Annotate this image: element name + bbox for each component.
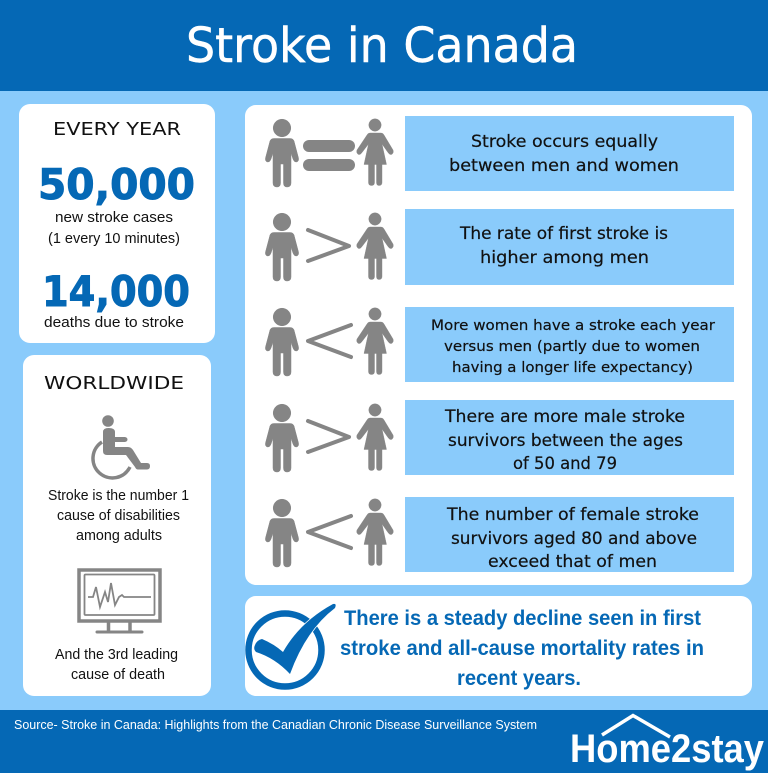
- callout text: stroke and all-cause mortality rates in: [340, 637, 704, 660]
- stat: deaths: 14,000: [42, 267, 190, 316]
- row: more female survivors: The number of female stroke: [446, 505, 699, 524]
- row: more women each year: [265, 307, 734, 382]
- row: more female survivors: exceed that of men: [488, 552, 657, 571]
- row: more male survivors: There are more male stroke: [444, 407, 685, 426]
- callout text: recent years.: [457, 667, 581, 690]
- text: disabilities: [48, 488, 189, 544]
- row: more women each year: More women have a stroke each year: [431, 318, 715, 334]
- source note: Source- Stroke in Canada: Highlights from the Canadian Chronic Disease Surveillance System: [14, 718, 537, 732]
- row: equal: [265, 116, 734, 191]
- icon: heart monitor: [79, 570, 160, 632]
- row: more women each year: having a longer life expectancy): [452, 360, 693, 376]
- stat: new stroke cases: 50,000: [38, 160, 195, 209]
- heading: every year: EVERY YEAR: [53, 120, 181, 140]
- row: more male survivors: survivors between the ages: [448, 431, 683, 450]
- callout text: There is a steady decline seen in first: [344, 607, 701, 630]
- stat: new stroke cases: new stroke cases: [55, 210, 173, 226]
- row: equal: Stroke occurs equally: [471, 132, 658, 151]
- text: disabilities: among adults: [76, 528, 162, 544]
- row: equal: between men and women: [449, 156, 679, 175]
- row: first stroke higher among men: [265, 209, 734, 285]
- row: more women each year: versus men (partly due to women: [444, 339, 700, 355]
- stat: deaths: deaths due to stroke: [44, 315, 184, 331]
- text: disabilities: cause of disabilities: [57, 508, 180, 524]
- text: third leading cause: And the 3rd leading: [55, 647, 178, 663]
- stat: new stroke cases: [38, 160, 195, 247]
- icon: wheelchair: [93, 415, 150, 478]
- heading: worldwide: WORLDWIDE: [44, 374, 184, 394]
- text: disabilities: Stroke is the number 1: [48, 488, 189, 504]
- title: Stroke in Canada: [186, 18, 578, 74]
- row: more male survivors: [265, 400, 734, 475]
- row: more female survivors: [265, 497, 734, 572]
- text: third leading cause: cause of death: [71, 667, 165, 683]
- panel: every year: [19, 104, 215, 343]
- footer band: [0, 710, 768, 773]
- stat: new stroke cases: (1 every 10 minutes): [48, 231, 180, 247]
- text: third leading cause: [55, 647, 178, 683]
- panel: comparisons: [245, 105, 752, 585]
- icon: check mark: [248, 604, 336, 686]
- row: first stroke higher among men: higher among men: [480, 248, 649, 267]
- row: first stroke higher among men: The rate of first stroke is: [459, 224, 668, 243]
- callout text: [340, 607, 704, 690]
- panel: worldwide: [23, 355, 211, 696]
- row: more male survivors: of 50 and 79: [513, 454, 617, 473]
- row: more female survivors: survivors aged 80 and above: [451, 529, 697, 548]
- header band: [0, 0, 768, 91]
- callout: steady decline: [245, 596, 752, 696]
